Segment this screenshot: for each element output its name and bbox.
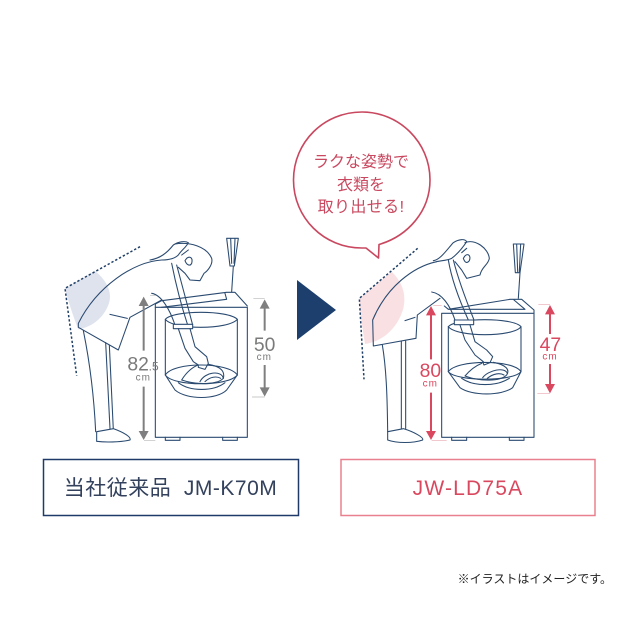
left figure: conventional model JM-K70M: [65, 238, 275, 442]
height arrow 80cm: cm: [423, 378, 438, 389]
height arrow 82.5cm: .5: [149, 359, 159, 373]
posture dashed line: [65, 247, 140, 376]
label box: JW-LD75A: [341, 460, 595, 516]
height arrow 82.5cm: cm: [136, 372, 151, 383]
depth arrow 50cm: [252, 298, 275, 397]
depth arrow 50cm: 50: [254, 335, 275, 356]
label box: conventional model: 当社従来品 JM-K70M: [64, 477, 277, 500]
height arrow 82.5cm: 82: [127, 354, 149, 375]
speech bubble: ラクな姿勢で: [313, 153, 409, 171]
depth arrow 47cm: cm: [542, 352, 558, 363]
height arrow 80cm: 80: [420, 361, 441, 382]
person: [78, 242, 212, 442]
label box: JW-LD75A: JW-LD75A: [413, 477, 523, 500]
posture dashed line: [359, 248, 418, 379]
speech bubble: 取り出せる!: [318, 198, 404, 216]
arrow between models: [297, 280, 336, 340]
depth arrow 50cm: cm: [257, 352, 272, 363]
label box: conventional model: [44, 460, 298, 516]
speech bubble: [294, 112, 430, 258]
height arrow 82.5cm: [127, 296, 159, 441]
depth arrow 47cm: [537, 304, 561, 393]
washing machine: [442, 244, 534, 440]
speech bubble: 衣類を: [337, 176, 385, 194]
right figure: JW-LD75A: [359, 240, 561, 442]
depth arrow 47cm: 47: [540, 335, 561, 356]
footnote: ※イラストはイメージです。: [458, 572, 612, 586]
person: [373, 240, 493, 442]
height arrow 80cm: [420, 305, 447, 441]
back highlight shade: [359, 272, 404, 344]
washing machine: [155, 238, 247, 440]
back highlight shade: [65, 271, 110, 329]
